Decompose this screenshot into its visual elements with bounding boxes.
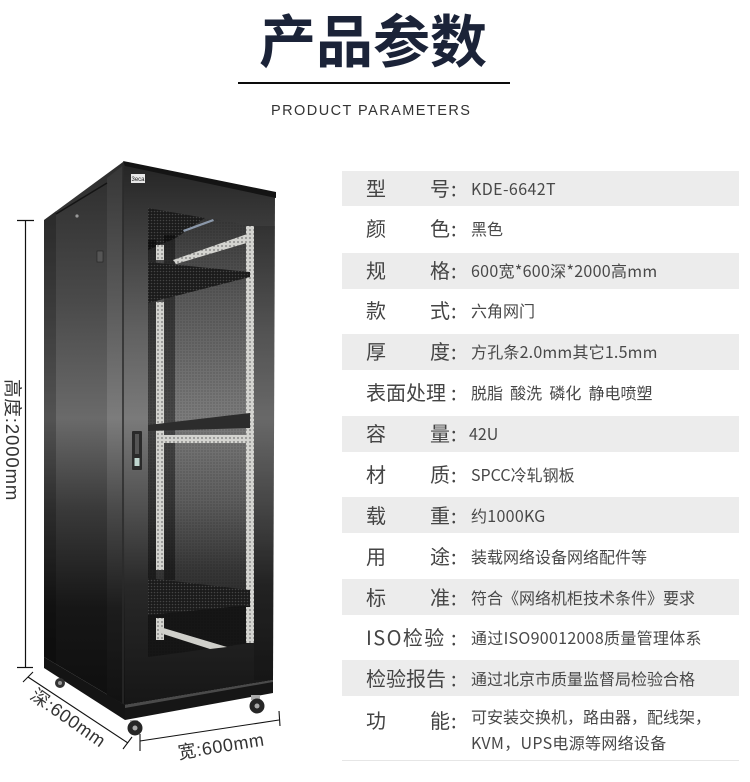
row: colour	[366, 213, 503, 242]
row: ISO inspection	[366, 622, 702, 651]
width dimension: 宽:600mm	[176, 730, 266, 763]
row: colour: 色	[430, 213, 450, 242]
row: use: 途	[430, 541, 450, 570]
row: function: 功	[366, 705, 386, 734]
bottom shelf	[148, 578, 250, 615]
row: colour: :	[451, 213, 457, 242]
row: material: SPCC冷轧钢板	[471, 462, 575, 486]
row: model: 型	[366, 173, 386, 202]
row: size: 600宽*600深*2000高mm	[471, 258, 657, 282]
title rule	[238, 82, 510, 84]
row: material: 材	[366, 459, 386, 488]
door logo badge	[131, 174, 145, 183]
width dimension	[140, 711, 280, 763]
depth dimension	[23, 672, 132, 751]
middle cross bar	[163, 435, 251, 443]
row: standard: :	[451, 582, 457, 611]
row: load: 约1000KG	[471, 503, 546, 527]
row: model: KDE-6642T	[471, 176, 556, 200]
upper cross bar	[173, 233, 250, 264]
row: size	[342, 253, 739, 289]
left upright rail	[156, 302, 164, 570]
row: model	[342, 171, 739, 206]
cabinet side panel	[44, 162, 125, 705]
middle bracket	[148, 413, 250, 431]
row: load: :	[451, 500, 457, 529]
row: function	[366, 704, 711, 754]
row: ISO inspection: 通过ISO90012008质量管理体系	[471, 625, 702, 649]
row: surface treatment: :	[451, 377, 457, 406]
depth dimension: 深:600mm	[27, 685, 110, 751]
row: size: 规	[366, 255, 386, 284]
row: inspection report: :	[451, 663, 457, 692]
row: thickness: 度	[430, 336, 450, 365]
row: material: :	[451, 459, 457, 488]
row: use: :	[451, 541, 457, 570]
door mesh window	[148, 208, 254, 657]
row: standard	[342, 579, 739, 615]
row: inspection report: 检验报告	[366, 663, 446, 692]
row: material: 质	[430, 459, 450, 488]
row: capacity: :	[451, 418, 457, 447]
row: function: :	[451, 705, 457, 734]
row: thickness: 方孔条2.0mm其它1.5mm	[471, 339, 658, 363]
row: surface treatment: 表面处理	[366, 377, 446, 406]
row: style: 式	[430, 295, 450, 324]
row: size: :	[451, 255, 457, 284]
subtitle: PRODUCT PARAMETERS	[271, 103, 471, 119]
row: thickness: 厚	[366, 336, 386, 365]
row: surface treatment: 脱脂 酸洗 磷化 静电喷塑	[471, 380, 653, 404]
row: use	[366, 541, 647, 570]
cabinet front door	[123, 161, 276, 705]
row: capacity: 容	[366, 418, 386, 447]
spec table	[342, 171, 739, 754]
row: style	[366, 295, 535, 324]
right upright rail	[246, 226, 254, 643]
row: colour: 黑色	[471, 216, 503, 240]
row: model: :	[451, 173, 457, 202]
row: function: 能	[430, 705, 450, 734]
casters	[55, 678, 264, 736]
height dimension: 高度:2000mm	[2, 379, 23, 501]
row: load	[342, 497, 739, 533]
row: capacity: 量	[430, 418, 450, 447]
row: function: 可安装交换机，路由器，配线架，	[471, 704, 711, 728]
row: colour: 颜	[366, 213, 386, 242]
top shelf	[148, 262, 250, 303]
row: function: KVM，UPS电源等网络设备	[471, 730, 667, 754]
row: inspection report: 通过北京市质量监督局检验合格	[471, 666, 695, 690]
row: use: 装载网络设备网络配件等	[471, 544, 647, 568]
cabinet base plinth	[44, 657, 273, 720]
row: size: 格	[430, 255, 450, 284]
row: ISO inspection: :	[451, 622, 457, 651]
door handle	[132, 431, 142, 470]
row: style: 六角网门	[471, 298, 535, 322]
row: standard: 标	[366, 582, 386, 611]
row: thickness: :	[451, 336, 457, 365]
cabinet illustration with dimensions	[2, 161, 280, 763]
row: load: 载	[366, 500, 386, 529]
table bottom rule	[342, 760, 739, 761]
row: style: :	[451, 295, 457, 324]
row: capacity	[342, 416, 739, 452]
row: capacity: 42U	[469, 421, 498, 445]
row: standard: 符合《网络机柜技术条件》要求	[471, 585, 695, 609]
door logo badge: 3eca	[131, 177, 145, 183]
row: ISO inspection: ISO检验	[366, 622, 446, 651]
row: load: 重	[430, 500, 450, 529]
row: use: 用	[366, 541, 386, 570]
row: surface treatment	[366, 377, 653, 406]
row: inspection report	[342, 660, 739, 696]
row: material	[366, 459, 575, 488]
row: standard: 准	[430, 582, 450, 611]
row: style: 款	[366, 295, 386, 324]
bottom rail and bar	[156, 618, 164, 640]
row: model: 号	[430, 173, 450, 202]
row: thickness	[342, 334, 739, 370]
